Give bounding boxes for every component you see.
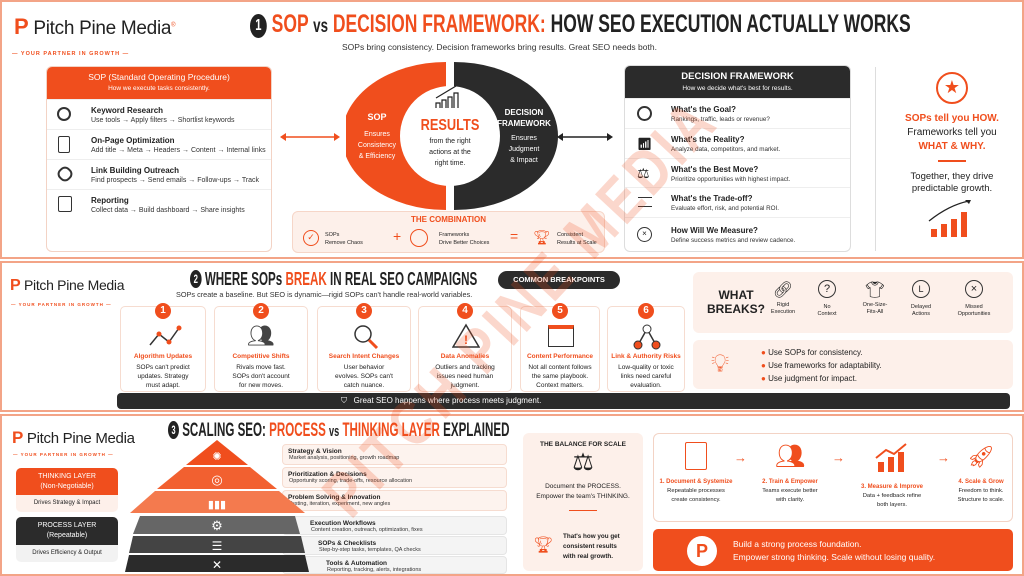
card 2: 2: [258, 305, 264, 316]
process steps: →: [937, 450, 950, 465]
process steps: 1. Document & Systemize: [659, 479, 733, 485]
card 1: SOPs can't predict: [136, 364, 190, 371]
process layer box: Drives Efficiency & Output: [32, 550, 102, 556]
donut: Ensures: [364, 131, 390, 138]
what breaks box: L: [918, 284, 924, 294]
lightbulb tips: ● Use judgment for impact.: [761, 374, 857, 383]
row: measure: [625, 217, 850, 253]
section 2: [0, 261, 1024, 412]
combination box: Consistent: [557, 232, 583, 238]
title: 1: [255, 17, 262, 34]
card 1: [120, 306, 206, 392]
balance for scale: [523, 433, 643, 571]
thinking layer box: [16, 468, 118, 512]
DF header: [625, 66, 850, 98]
what breaks box: 🔗︎: [773, 282, 793, 299]
banner: Build a strong process foundation.: [733, 539, 862, 549]
logo: P Pitch Pine Media: [10, 277, 124, 294]
process layer box: [16, 517, 118, 562]
pyramid: [125, 440, 309, 572]
what breaks box: ?: [824, 283, 830, 295]
section 3: Testing, iteration, experiment, new angles: [289, 501, 390, 507]
combination box: SOPs: [325, 232, 339, 238]
card 3: User behavior: [344, 364, 384, 371]
process steps: 👥︎: [775, 443, 805, 470]
layer descriptions: Strategy & Vision: [288, 448, 342, 455]
process steps: 3. Measure & Improve: [861, 484, 923, 490]
combination box: +: [393, 228, 401, 244]
title: SOP vs DECISION FRAMEWORK: HOW SEO EXECUTION ACTUALLY WORKS: [272, 10, 911, 38]
row: link building: Find prospects → Send emails → Follow-ups → Track: [91, 177, 259, 184]
combination box: Results at Scale: [557, 240, 597, 246]
combination box: 🏆︎: [533, 229, 551, 245]
process steps: Freedom to think.: [958, 488, 1004, 494]
process steps: 4. Scale & Grow: [958, 479, 1004, 485]
row: on-page: Add title → Meta → Headers → Content → Internal links: [91, 147, 266, 154]
card 4: !: [464, 333, 468, 347]
process steps: Data + feedback refine: [863, 493, 921, 499]
thinking layer box: (Non-Negotiable): [40, 483, 94, 490]
pill: [498, 271, 620, 289]
row: on-page: On-Page Optimization: [91, 136, 175, 145]
process layer box: PROCESS LAYER: [38, 522, 96, 529]
title: 2: [194, 272, 198, 286]
what breaks box: Delayed: [911, 304, 931, 310]
donut: & Efficiency: [359, 153, 396, 160]
row: best move: [625, 158, 850, 187]
section 3: Opportunity scoring, trade-offs, resource allocation: [289, 478, 412, 484]
section 3: Problem Solving & Innovation: [288, 494, 380, 501]
row: on-page: [47, 129, 271, 159]
card 4: issues need human: [437, 373, 493, 380]
card 4: 4: [462, 305, 468, 316]
pyramid: ✺: [212, 451, 222, 463]
row: best move: ⚖︎: [637, 165, 650, 181]
card 4: judgment.: [451, 382, 479, 389]
banner: [653, 529, 1013, 571]
process steps: 2. Train & Empower: [762, 479, 818, 485]
SOP header: [47, 67, 271, 99]
row: trade-off: [625, 187, 850, 217]
balance for scale: THE BALANCE FOR SCALE: [540, 441, 626, 448]
card 6: 6: [643, 305, 649, 316]
section 3: Step-by-step tasks, templates, QA checks: [319, 547, 421, 553]
what breaks box: Actions: [912, 311, 930, 317]
panel: SOP: [46, 66, 272, 252]
process steps: Structure to scale.: [958, 497, 1004, 503]
title: SCALING SEO: PROCESS vs THINKING LAYER EXPLAINED: [182, 420, 509, 441]
dark bar: [117, 393, 1010, 409]
row: keyword research: [47, 99, 271, 129]
balance for scale: Empower the team's THINKING.: [536, 493, 630, 500]
what breaks box: BREAKS?: [707, 302, 765, 316]
card 3: catch nuance.: [344, 382, 384, 389]
logo: P Pitch Pine Media®: [14, 14, 175, 39]
card 1: updates. Strategy: [138, 373, 188, 380]
donut: Consistency: [358, 142, 397, 149]
card 4: Outliers and tracking: [435, 364, 495, 371]
donut: actions at the: [429, 149, 471, 156]
card 3: [317, 306, 411, 392]
SOP header: How we execute tasks consistently.: [108, 85, 210, 92]
card 1: 1: [160, 305, 166, 316]
card 3: evolves. SOPs can't: [335, 373, 393, 380]
pyramid: ◎: [211, 472, 223, 487]
tagline: — YOUR PARTNER IN GROWTH —: [13, 452, 114, 457]
arrow: left: [280, 133, 340, 141]
card 6: Low-quality or toxic: [618, 364, 674, 371]
process steps: →: [832, 450, 845, 465]
process steps: 🚀︎: [967, 444, 995, 469]
balance for scale: That's how you get: [563, 533, 620, 540]
pill: COMMON BREAKPOINTS: [513, 275, 605, 284]
row: best move: Prioritize opportunities with highest impact.: [671, 176, 790, 183]
donut: [346, 62, 558, 210]
row: reporting: [47, 189, 271, 219]
card 2: Rivals move fast.: [236, 364, 286, 371]
process steps: with clarity.: [776, 497, 804, 503]
layer descriptions: Market analysis, positioning, growth roadmap: [289, 455, 399, 461]
process steps: Teams execute better: [762, 488, 818, 494]
what breaks box: Missed: [965, 304, 983, 310]
row: goal: What's the Goal?: [671, 105, 736, 114]
row: measure: Define success metrics and review cadence.: [671, 237, 795, 244]
row: reality: Analyze data, competitors, and market.: [671, 146, 780, 153]
donut: from the right: [429, 138, 471, 145]
title: WHERE SOPs BREAK IN REAL SEO CAMPAIGNS: [205, 269, 477, 289]
section 3: SOPs & Checklists: [318, 540, 376, 547]
what breaks box: Execution: [771, 309, 795, 315]
card 3: 3: [361, 305, 367, 316]
layer descriptions: [282, 444, 507, 465]
what breaks box: One-Size-: [863, 302, 887, 308]
combination box: THE COMBINATION: [411, 215, 486, 224]
process steps: Repeatable processes: [667, 488, 725, 494]
row: link building: Link Building Outreach: [91, 166, 179, 175]
card 2: SOPs don't account: [232, 373, 290, 380]
logo: P Pitch Pine Media: [12, 428, 135, 447]
donut: SOP: [367, 112, 387, 122]
process steps: both layers.: [877, 502, 907, 508]
callout: SOPs tell you how: [905, 72, 999, 237]
DF header: DECISION FRAMEWORK: [681, 71, 794, 82]
section 3: Content creation, outreach, optimization, fixes: [311, 527, 423, 533]
card 2: for new moves.: [239, 382, 283, 389]
card 2: 👥︎: [247, 323, 275, 348]
balance for scale: 🏆︎: [533, 537, 553, 554]
what breaks box: 👕︎: [865, 282, 885, 299]
combination box: =: [510, 228, 518, 244]
process steps: [653, 433, 1013, 522]
card 1: Algorithm Updates: [134, 353, 192, 360]
row: link building: [47, 159, 271, 189]
balance for scale: Document the PROCESS.: [545, 483, 621, 490]
SOP header: SOP (Standard Operating Procedure): [88, 72, 230, 82]
title: 3: [171, 423, 176, 437]
combination box: [292, 211, 605, 253]
card 1: must adapt.: [146, 382, 180, 389]
donut: Ensures: [511, 135, 537, 142]
section 1: [0, 0, 1024, 259]
callout: SOPs tell you how: predictable growth.: [912, 182, 992, 194]
donut: RESULTS: [421, 117, 480, 134]
pyramid: ▮▮▮: [208, 499, 226, 511]
tagline: — YOUR PARTNER IN GROWTH —: [11, 302, 112, 307]
balance for scale: with real growth.: [563, 553, 613, 560]
what breaks box: [693, 272, 1013, 333]
row: reporting: Collect data → Build dashboard → Share insights: [91, 207, 245, 214]
callout: SOPs tell you how: Frameworks tell you: [907, 127, 997, 138]
card 2: [214, 306, 308, 392]
card 6: links need careful: [621, 373, 671, 380]
balance for scale: ⚖︎: [572, 449, 594, 476]
what breaks box: WHAT: [718, 288, 754, 302]
donut: FRAMEWORK: [497, 119, 551, 128]
card 5: 5: [557, 305, 563, 316]
row: trade-off: Evaluate effort, risk, and potential ROI.: [671, 205, 779, 212]
callout: SOPs tell you how: SOPs tell you HOW.: [905, 113, 999, 124]
row: goal: Rankings, traffic, leads or revenue?: [671, 116, 770, 123]
balance for scale: consistent results: [563, 543, 617, 550]
card 5: Context matters.: [536, 382, 584, 389]
callout: SOPs tell you how: ★: [944, 77, 960, 97]
DF header: How we decide what's best for results.: [682, 85, 793, 92]
subtitle: SOPs bring consistency. Decision frameworks bring results. Great SEO needs both.: [342, 42, 657, 52]
row: measure: ×: [642, 229, 647, 238]
what breaks box: Context: [818, 311, 836, 317]
process steps: create consistency.: [671, 497, 721, 503]
row: keyword research: Keyword Research: [91, 106, 163, 115]
card 3: Search Intent Changes: [329, 353, 399, 360]
pyramid: ✕: [212, 558, 222, 572]
pyramid: ☰: [212, 539, 222, 553]
banner: P: [696, 541, 708, 561]
card 2: Competitive Shifts: [232, 353, 290, 360]
banner: Empower strong thinking. Scale without losing quality.: [733, 552, 935, 562]
section 3: Tools & Automation: [326, 560, 387, 567]
section 3: Prioritization & Decisions: [288, 471, 367, 478]
card 6: evaluation.: [630, 382, 662, 389]
row: reality: What's the Reality?: [671, 135, 744, 144]
row: keyword research: Use tools → Apply filters → Shortlist keywords: [91, 117, 235, 124]
thinking layer box: Drives Strategy & Impact: [34, 500, 100, 506]
dark bar: ⛉ Great SEO happens where process meets judgment.: [341, 396, 541, 405]
tagline: — YOUR PARTNER IN GROWTH —: [12, 51, 129, 57]
what breaks box: Fits-All: [867, 309, 883, 315]
combination box: ✓: [307, 232, 315, 242]
section 3: Reporting, tracking, alerts, integrations: [327, 567, 421, 573]
callout: SOPs tell you how: WHAT & WHY.: [918, 141, 986, 152]
row: reality: 📶︎: [637, 137, 652, 151]
card 4: Data Anomalies: [441, 353, 489, 360]
card 5: the same playbook.: [532, 373, 588, 380]
watermark: PITCH PINE MEDIA: [308, 84, 732, 530]
row: measure: How Will We Measure?: [671, 226, 758, 235]
process layer box: (Repeatable): [47, 532, 87, 539]
what breaks box: No: [823, 304, 831, 310]
donut: right time.: [435, 160, 465, 167]
card 6: Link & Authority Risks: [611, 353, 681, 360]
what breaks box: ×: [971, 283, 977, 295]
row: trade-off: What's the Trade-off?: [671, 194, 752, 203]
callout: SOPs tell you how: Together, they drive: [911, 170, 993, 182]
lightbulb tips: 💡︎: [711, 348, 729, 378]
thinking layer box: THINKING LAYER: [38, 473, 96, 480]
card 5: Content Performance: [527, 353, 593, 360]
lightbulb tips: ● Use SOPs for consistency.: [761, 348, 863, 357]
panel: decision framework: [624, 65, 851, 252]
section 3: Execution Workflows: [310, 520, 376, 527]
lightbulb tips: [693, 340, 1013, 389]
combination box: Drive Better Choices: [439, 240, 489, 246]
row: best move: What's the Best Move?: [671, 165, 758, 174]
donut: & Impact: [510, 157, 538, 164]
card 6: [607, 306, 685, 392]
card 4: [418, 306, 512, 392]
what breaks box: Opportunities: [958, 311, 990, 317]
arrow: right: [558, 133, 613, 141]
pyramid: ⚙: [211, 518, 223, 533]
card 5: Not all content follows: [528, 364, 592, 371]
row: goal: [625, 98, 850, 128]
donut: DECISION: [505, 108, 544, 117]
row: reporting: Reporting: [91, 196, 129, 205]
subtitle: SOPs create a baseline. But SEO is dynamic—rigid SOPs can't handle real-world variables.: [176, 290, 472, 299]
process steps: →: [734, 450, 747, 465]
combination box: Frameworks: [439, 232, 469, 238]
card 5: [520, 306, 600, 392]
row: reality: [625, 128, 850, 158]
donut: Judgment: [509, 146, 539, 153]
combination box: Remove Chaos: [325, 240, 363, 246]
what breaks box: Rigid: [777, 302, 789, 308]
section 3: [0, 414, 1024, 576]
lightbulb tips: ● Use frameworks for adaptability.: [761, 361, 882, 370]
